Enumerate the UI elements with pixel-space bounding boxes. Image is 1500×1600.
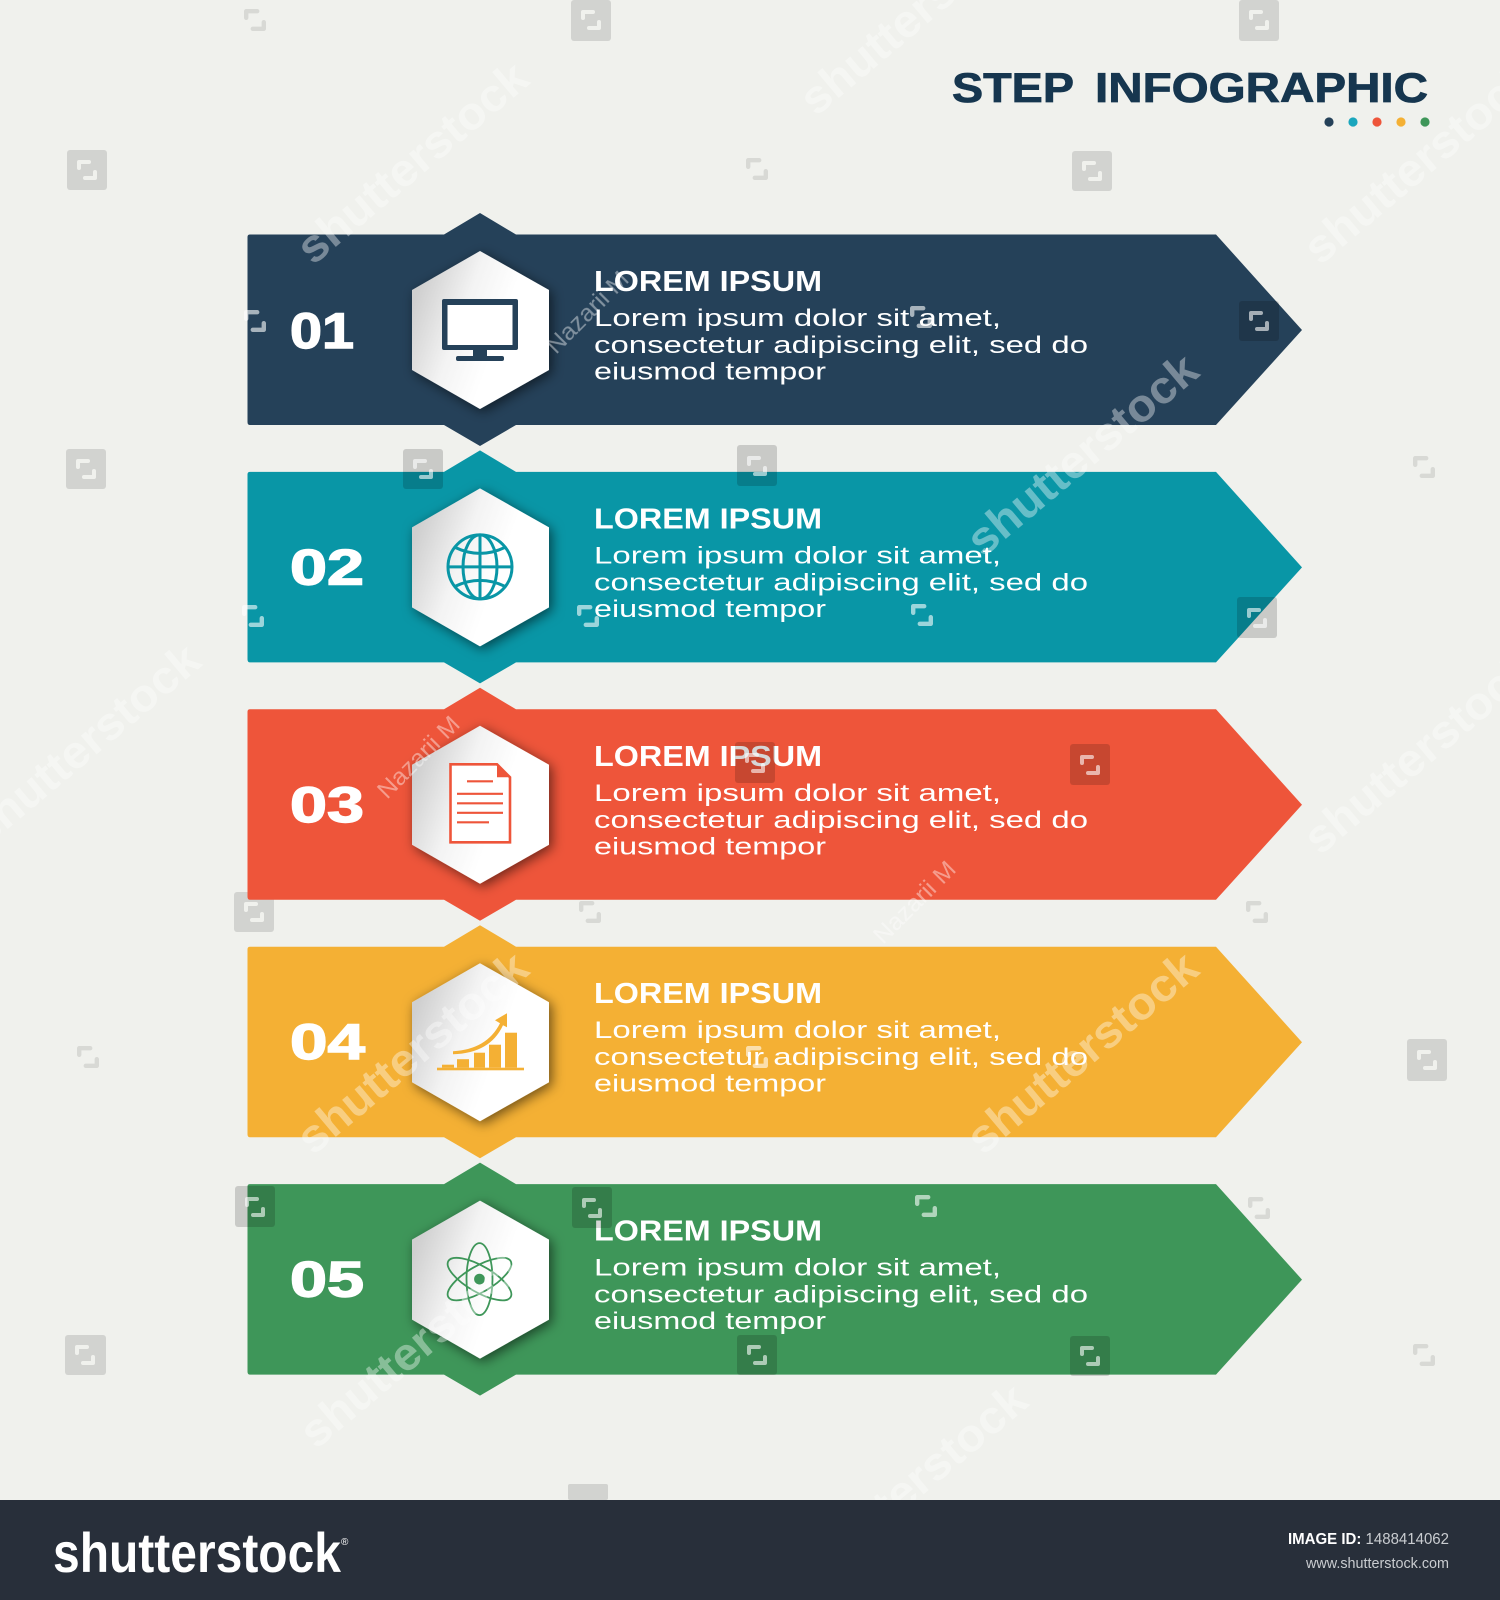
heading 03: LOREM IPSUM [594, 741, 822, 773]
arrow band 04 [248, 925, 1302, 1158]
watermark: shutterstock text: Nazarii M [541, 266, 634, 359]
icon: monitor [442, 299, 518, 361]
footer bar [0, 1500, 1500, 1600]
watermark: shutterstock text: shutterstock [286, 50, 538, 274]
watermark: shutterstock text: shutterstock [956, 342, 1208, 566]
text block 02: Lorem ipsum dolor sit amet, [594, 542, 1001, 569]
number 05: 05 [290, 1252, 364, 1308]
text block 04 [594, 1017, 1088, 1098]
panel: step 01 [248, 213, 1302, 446]
hexagon 01 [412, 251, 549, 409]
hexagon 05 [412, 1201, 549, 1359]
text block 05: eiusmod tempor [594, 1308, 826, 1335]
icon: growth chart [437, 1013, 524, 1070]
registered mark: ® [341, 1537, 349, 1548]
text block 01: consectetur adipiscing elit, sed do [594, 332, 1088, 359]
text block 02 [594, 542, 1088, 623]
text block 01: eiusmod tempor [594, 358, 826, 386]
text block 02: consectetur adipiscing elit, sed do [594, 569, 1088, 596]
panel: step 04 [248, 925, 1302, 1158]
arrow band 03 [248, 688, 1302, 921]
text block 03: Lorem ipsum dolor sit amet, [594, 780, 1001, 807]
text block 04: consectetur adipiscing elit, sed do [594, 1044, 1088, 1071]
title [952, 64, 1428, 111]
watermark: tiles and marks over bands [235, 301, 1279, 1376]
heading 05: LOREM IPSUM [594, 1216, 822, 1248]
icon: globe [448, 535, 512, 599]
watermark: shutterstock text: Nazarii M [372, 711, 465, 804]
title: STEP [952, 64, 1074, 111]
text block 05 [594, 1255, 1088, 1335]
hexagon 02 [412, 488, 549, 646]
text block 02: eiusmod tempor [594, 596, 826, 623]
hexagon 04 [412, 963, 549, 1121]
text block 03: consectetur adipiscing elit, sed do [594, 807, 1088, 834]
arrow band 05 [248, 1163, 1302, 1396]
hexagon 03 [412, 726, 549, 884]
text block 03: eiusmod tempor [594, 833, 826, 860]
heading 04: LOREM IPSUM [594, 978, 822, 1010]
panel: step 02 [248, 450, 1302, 683]
text block 01 [594, 305, 1088, 386]
number 04: 04 [290, 1014, 365, 1070]
heading 02: LOREM IPSUM [594, 503, 822, 535]
text block 05: consectetur adipiscing elit, sed do [594, 1282, 1088, 1309]
panel: step 05 [248, 1163, 1302, 1396]
footer logo: shutterstock [53, 1521, 342, 1584]
title: INFOGRAPHIC [1095, 64, 1428, 111]
text block 04: Lorem ipsum dolor sit amet, [594, 1017, 1001, 1044]
icon: atom [442, 1243, 517, 1315]
watermark: shutterstock text: Nazarii M [868, 856, 961, 949]
number 01: 01 [290, 303, 354, 359]
heading 01: LOREM IPSUM [594, 266, 822, 298]
number 02: 02 [290, 539, 364, 595]
icon: document [450, 764, 510, 842]
text block 05: Lorem ipsum dolor sit amet, [594, 1255, 1001, 1282]
text block 01: Lorem ipsum dolor sit amet, [594, 305, 1001, 332]
text block 04: eiusmod tempor [594, 1071, 826, 1098]
number 03: 03 [290, 777, 364, 833]
watermark: shutterstock text: shutterstock [956, 940, 1208, 1164]
watermark: shutterstock text: shutterstock [785, 1372, 1037, 1596]
watermark: shutterstock text: shutterstock [286, 940, 538, 1164]
title dots [1324, 117, 1430, 127]
footer url: www.shutterstock.com [1305, 1555, 1449, 1572]
watermark: shutterstock text: shutterstock [289, 1234, 541, 1458]
panel: step 03 [248, 688, 1302, 921]
text block 03 [594, 780, 1088, 860]
arrow band 02 [248, 450, 1302, 683]
image id: IMAGE ID: 1488414062 [1288, 1531, 1449, 1548]
arrow band 01 [248, 213, 1302, 446]
